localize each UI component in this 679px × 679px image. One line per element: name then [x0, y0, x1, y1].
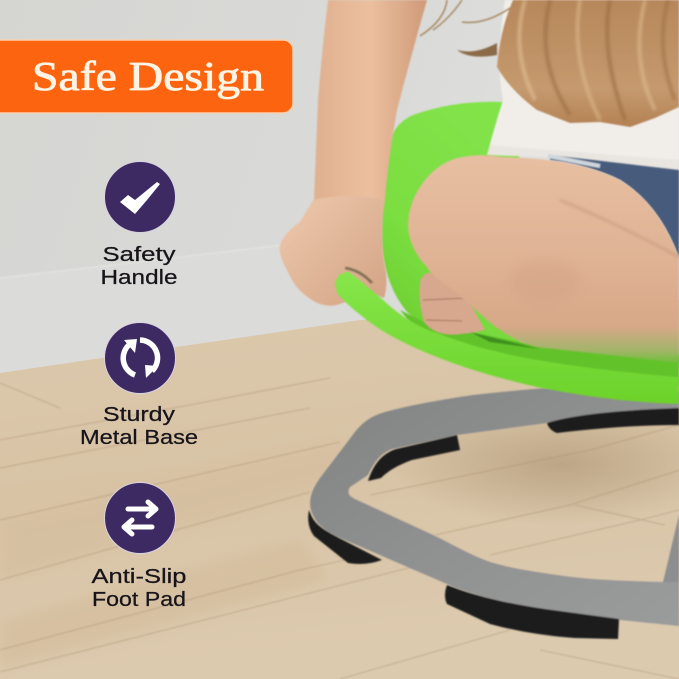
seat surface: [400, 310, 679, 385]
icon: opposing arrows: [104, 482, 176, 554]
metal tube: [310, 388, 679, 626]
hair: [420, 0, 679, 127]
green seat: [382, 102, 679, 385]
foot pad: left: [308, 510, 382, 564]
title: Safe Design: [32, 53, 264, 99]
banner: Safe Design: [0, 40, 293, 113]
wall background: [0, 0, 679, 400]
foot pad: rear left: [368, 435, 460, 481]
label: Anti-Slip Foot Pad: Anti-Slip: [92, 566, 186, 588]
feature: Sturdy Metal Base: [80, 322, 198, 449]
icon: check mark: [104, 162, 176, 232]
wooden floor: [0, 300, 679, 679]
crossed leg: [408, 155, 679, 363]
label: Anti-Slip Foot Pad: Foot Pad: [92, 589, 186, 611]
denim shorts: [548, 155, 679, 258]
icon: rotating arrows: [104, 322, 176, 394]
label: Safety Handle: Safety: [102, 244, 176, 266]
arm and hand gripping handle: [280, 0, 427, 306]
seat back: [382, 102, 520, 350]
foot pad: rear right: [547, 408, 679, 433]
label: Safety Handle: Handle: [100, 267, 178, 289]
feature: Anti-Slip Foot Pad: [92, 482, 186, 611]
label: Sturdy Metal Base: Metal Base: [80, 427, 198, 449]
toes: [419, 273, 540, 349]
seat rim handle: [335, 272, 679, 404]
foot pad: front: [445, 585, 619, 639]
label: Sturdy Metal Base: Sturdy: [103, 404, 175, 426]
shirt: [487, 0, 679, 172]
feature: Safety Handle: [100, 162, 178, 289]
centre strut: [663, 515, 679, 582]
chair base: grey metal frame and foot pads: [308, 388, 679, 639]
